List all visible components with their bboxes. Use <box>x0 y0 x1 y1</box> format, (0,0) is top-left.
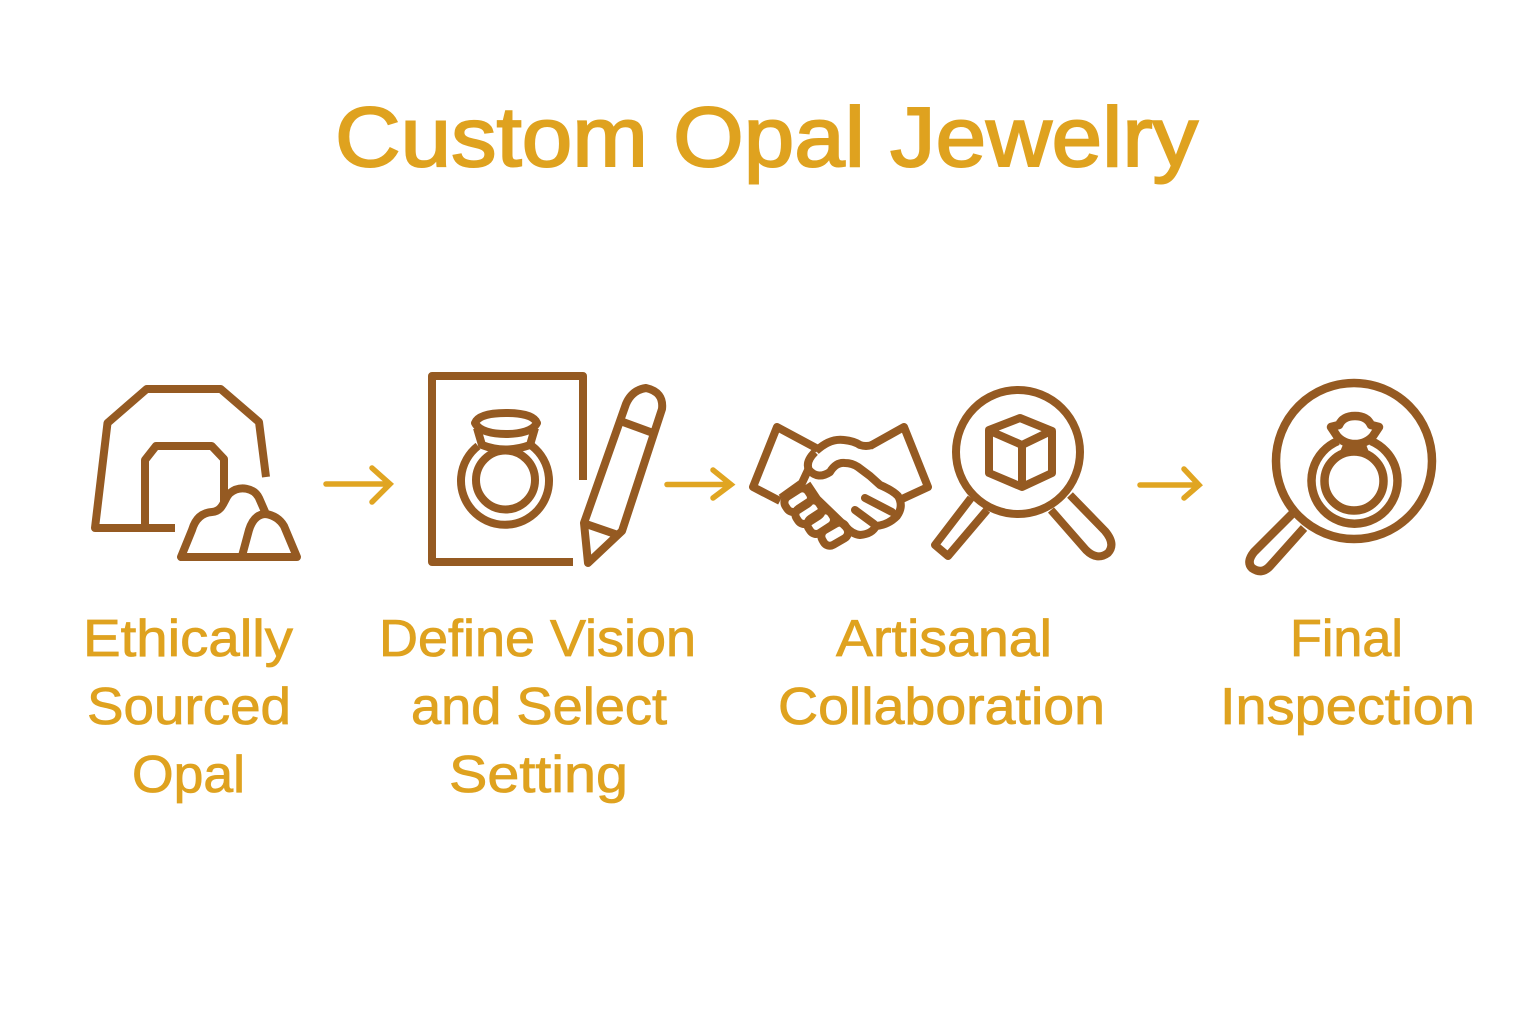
paper sheet <box>432 376 583 562</box>
icon: magnifier inspecting ring <box>1249 383 1432 571</box>
label: step 1: Ethically <box>83 610 293 668</box>
left cuff <box>753 427 818 501</box>
label: step 4 <box>1220 610 1475 736</box>
clasped hands <box>816 440 872 451</box>
arrow: step 2 to 3 <box>667 470 731 498</box>
label: step 1: Sourced <box>87 678 291 736</box>
pencil <box>584 388 662 563</box>
right cuff <box>870 427 928 499</box>
icon: handshake <box>753 427 928 548</box>
label: step 2: and Select <box>411 678 668 736</box>
label: step 1: Opal <box>132 746 245 804</box>
label: step 3: Collaboration <box>778 678 1105 736</box>
label: step 2: Setting <box>449 746 628 804</box>
label: step 3: Artisanal <box>836 610 1052 668</box>
icon: ring sketch with pencil <box>432 376 662 563</box>
title: Custom Opal Jewelry <box>335 90 1198 184</box>
label: step 4: Final <box>1290 610 1403 668</box>
arrow: step 3 to 4 <box>1140 469 1199 498</box>
arrow: step 1 to 2 <box>326 468 390 502</box>
ring sketch <box>461 413 549 525</box>
label: step 1 <box>83 610 293 804</box>
fingers <box>782 486 814 515</box>
label: step 2 <box>379 610 696 804</box>
icon: mine entrance with rocks <box>95 389 297 557</box>
label: step 2: Define Vision <box>379 610 696 668</box>
label: step 3 <box>778 610 1105 736</box>
label: step 4: Inspection <box>1220 678 1475 736</box>
icon: magnifier with cube <box>935 390 1111 556</box>
